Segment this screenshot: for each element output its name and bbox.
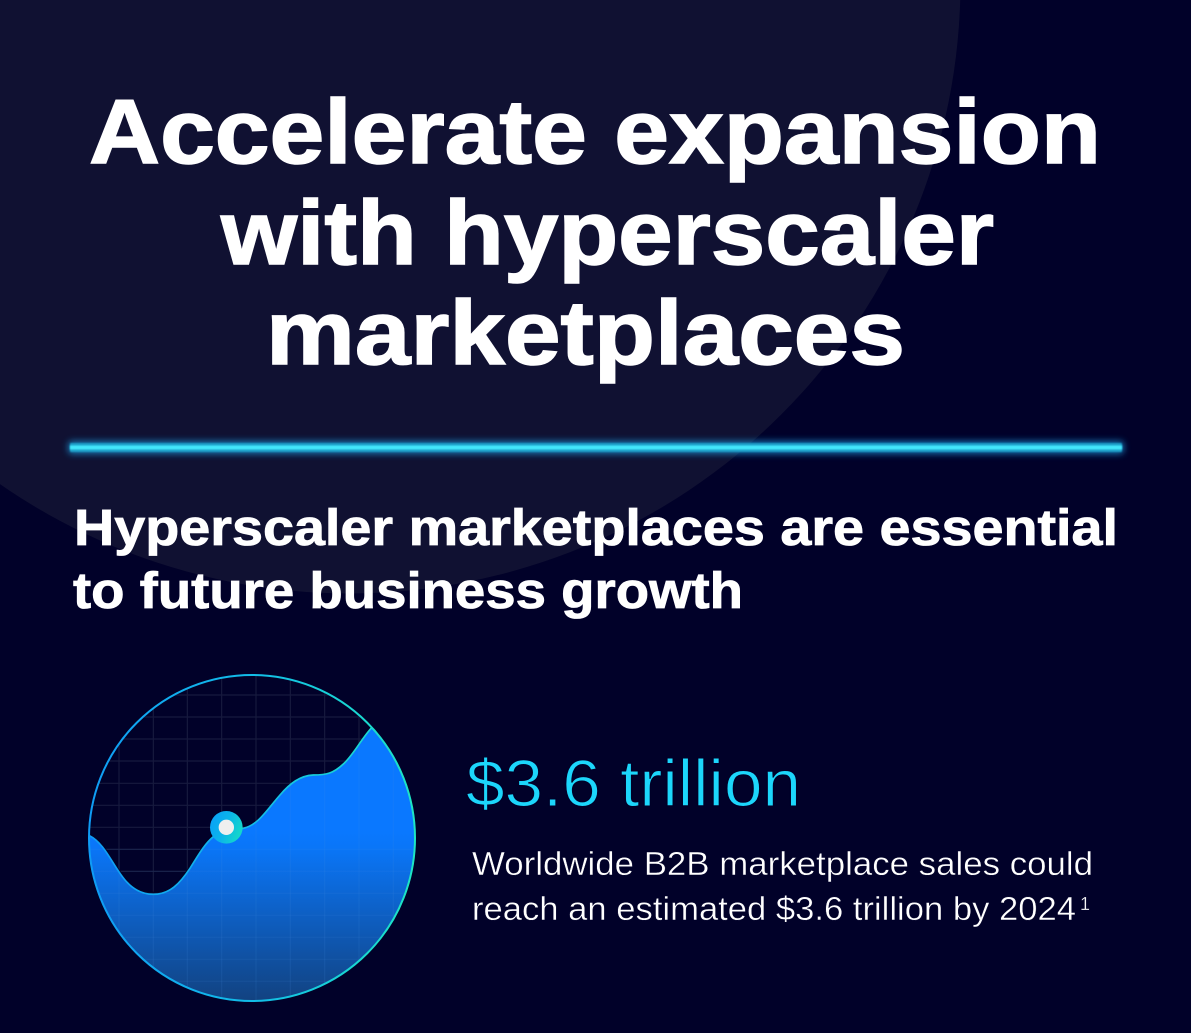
- title: with hyperscaler: [220, 183, 994, 284]
- stat description: reach an estimated $3.6 trillion by 2024: [472, 890, 1076, 927]
- title: Accelerate expansion: [89, 82, 1101, 183]
- chart ring: [89, 675, 415, 1001]
- stat value: $3.6 trillion: [466, 746, 801, 820]
- stat description: [472, 845, 1093, 927]
- subheading: to future business growth: [73, 562, 743, 619]
- grid over fill: [106, 848, 394, 1000]
- stat description: 1: [1080, 894, 1090, 914]
- subheading: Hyperscaler marketplaces are essential: [74, 499, 1118, 556]
- chart area fill: [90, 728, 414, 1000]
- title: [89, 82, 1101, 384]
- chart line: [89, 728, 372, 894]
- stat description: Worldwide B2B marketplace sales could: [472, 845, 1093, 882]
- chart grid: [90, 676, 362, 894]
- chart marker: [210, 811, 243, 844]
- title: marketplaces: [266, 283, 905, 384]
- subheading: [73, 499, 1118, 619]
- background large circle: [0, 0, 960, 594]
- circular area chart: [88, 674, 416, 1002]
- glowing divider: [68, 441, 1124, 454]
